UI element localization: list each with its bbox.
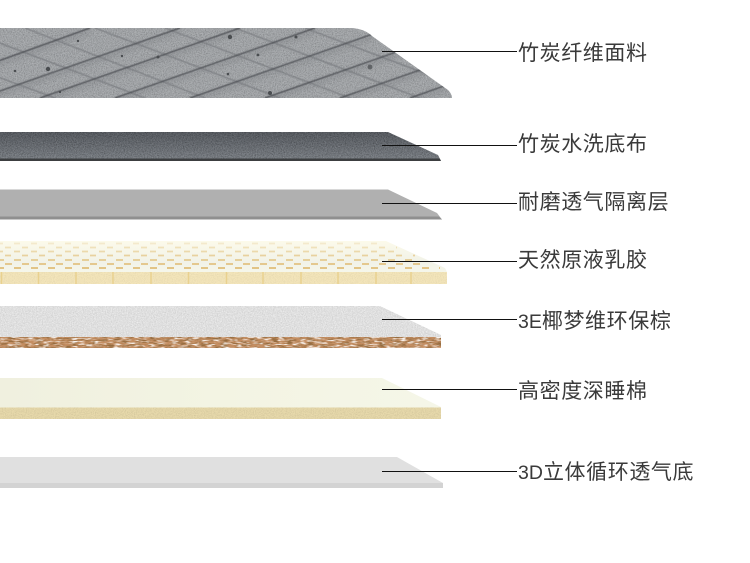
label: natural latex: 天然原液乳胶 bbox=[518, 249, 648, 272]
layer: bamboo charcoal fiber fabric bbox=[0, 28, 452, 98]
leader lines bbox=[382, 52, 517, 472]
layer: natural latex bbox=[0, 241, 447, 284]
layer: bamboo charcoal washed base fabric bbox=[0, 132, 441, 161]
label: high density deep sleep foam: 高密度深睡棉 bbox=[518, 380, 648, 403]
layer: high density deep sleep foam bbox=[0, 378, 441, 419]
layer: wear-resistant breathable barrier bbox=[0, 190, 442, 220]
label: 3D breathable base: 3D立体循环透气底 bbox=[518, 461, 694, 484]
label: bamboo charcoal washed base fabric: 竹炭水洗底布 bbox=[518, 133, 648, 156]
label: 3E coconut palm: 3E椰梦维环保棕 bbox=[518, 310, 671, 333]
label: wear-resistant breathable barrier: 耐磨透气隔离层 bbox=[518, 191, 669, 214]
label: bamboo charcoal fiber fabric: 竹炭纤维面料 bbox=[518, 42, 648, 65]
infographic: mattress layers bbox=[0, 28, 693, 488]
layer: 3D breathable base bbox=[0, 457, 443, 488]
layer: 3E coconut palm bbox=[0, 306, 441, 348]
